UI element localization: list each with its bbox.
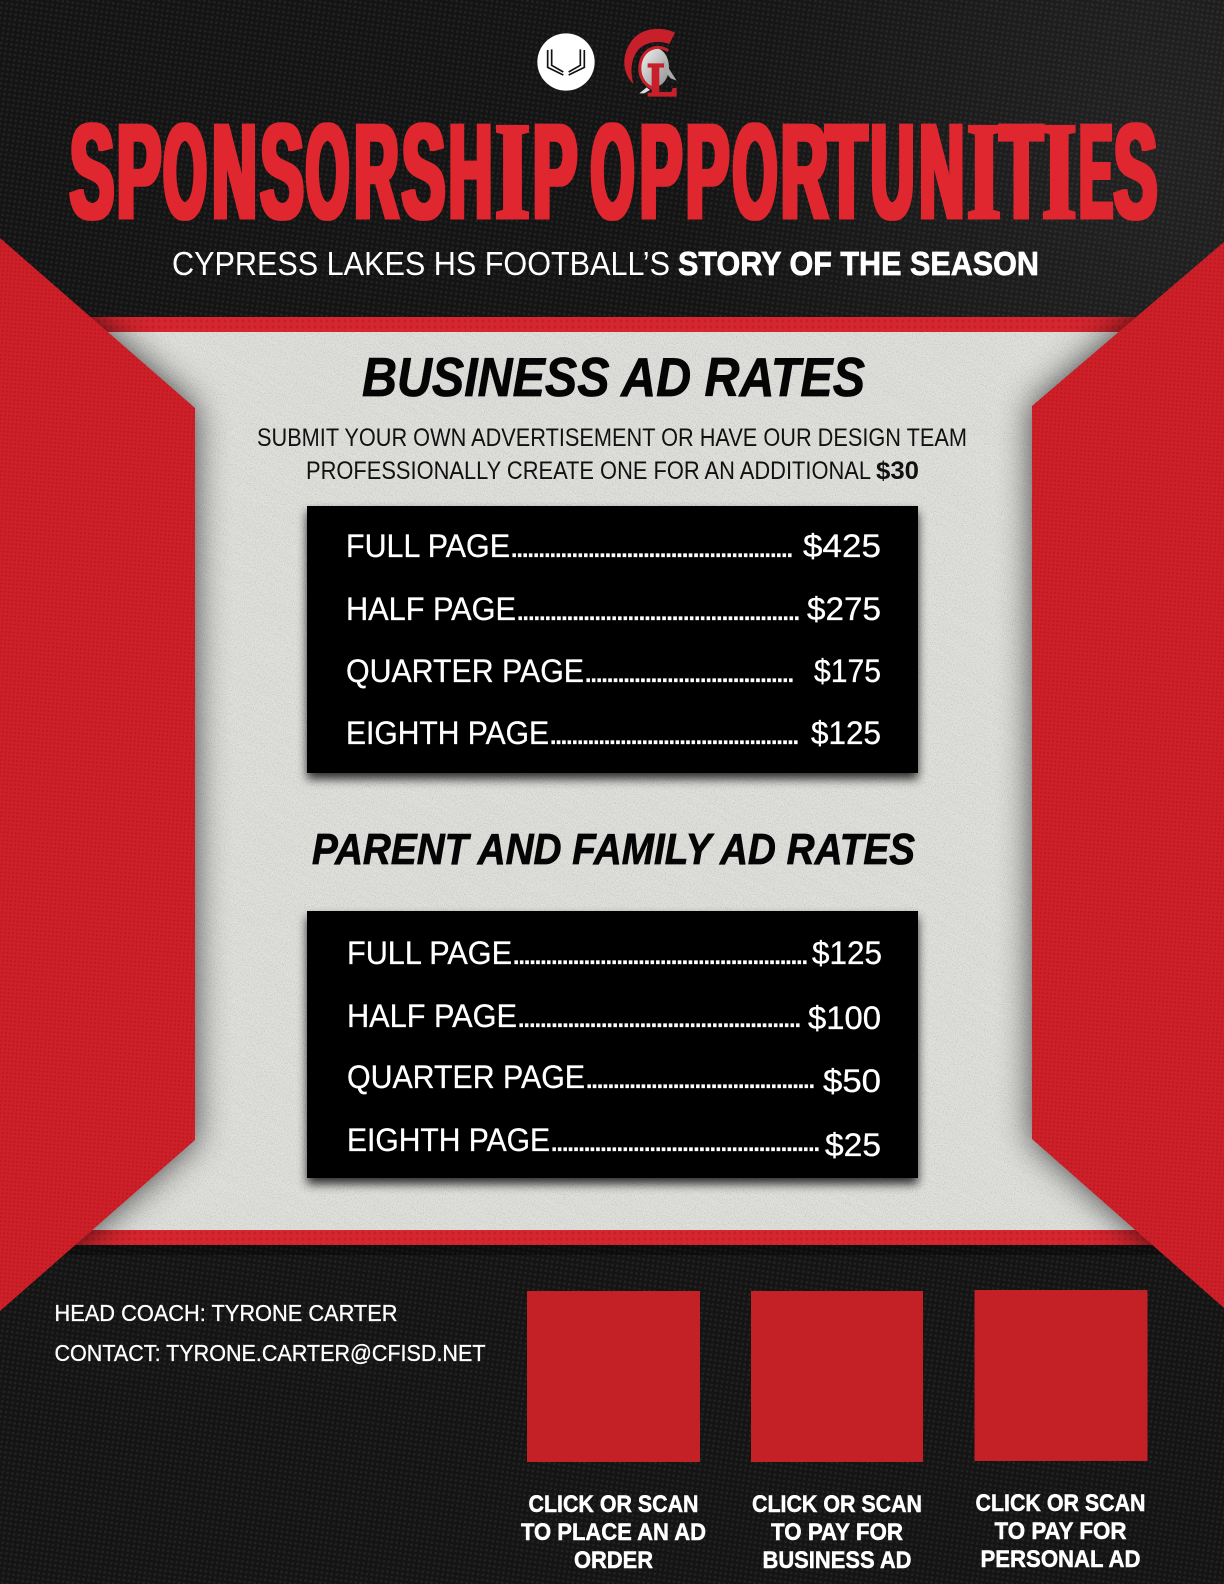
text: S (1114, 96, 1157, 247)
row: eighth page: ................................................. (551, 1130, 820, 1156)
row: half page: ................................................... (517, 599, 800, 625)
title: E (1080, 96, 1112, 247)
row: eighth page: $125 (811, 715, 881, 751)
heading: parent and family ad rates: PARENT AND FAMILY AD RATES (312, 825, 915, 874)
title: R (781, 96, 828, 247)
title (70, 94, 1157, 249)
paper and band shading cast by side panels (0, 238, 1224, 1311)
row: quarter page: ...................................... (585, 661, 794, 687)
row: eighth page (346, 715, 881, 751)
panel: business rates table (307, 506, 918, 779)
text block: design team note: PROFESSIONALLY CREATE ONE FOR AN ADDITIONAL (306, 457, 871, 485)
row: full page: $425 (803, 528, 881, 564)
row: eighth page: .............................................. (550, 723, 799, 749)
title: N (920, 96, 964, 247)
caption: pay for personal ad (976, 1490, 1146, 1573)
caption: pay for personal ad: PERSONAL AD (980, 1546, 1140, 1573)
caption: place an ad order: ORDER (574, 1547, 653, 1574)
row: eighth page (347, 1122, 881, 1163)
title: R (354, 96, 398, 247)
paper scratches (90, 332, 1140, 1230)
row: half page: ................................................... (518, 1006, 801, 1032)
row: quarter page: QUARTER PAGE (346, 653, 584, 689)
row: eighth page: $25 (825, 1127, 881, 1163)
caption: place an ad order: CLICK OR SCAN (528, 1491, 698, 1518)
text block: design team note: $30 (876, 457, 919, 485)
subtitle: STORY OF THE SEASON (678, 245, 1039, 282)
title: P (640, 96, 682, 247)
caption: pay for business ad: TO PAY FOR (771, 1519, 903, 1546)
row: full page: $125 (812, 935, 882, 971)
bottom red band (60, 1230, 1164, 1245)
row: half page (347, 998, 881, 1036)
title: I (1043, 94, 1076, 249)
caption: pay for business ad: BUSINESS AD (762, 1547, 912, 1574)
title: U (871, 96, 914, 247)
icon: spartan helmet logo (624, 29, 677, 97)
text block: coach contact: CONTACT: TYRONE.CARTER@CFISD.NET (54, 1340, 486, 1366)
paper surface (90, 332, 1140, 1230)
row: full page: FULL PAGE (346, 528, 510, 564)
row: full page: ...................................................... (513, 943, 808, 969)
row: full page (346, 528, 881, 564)
text block: coach contact: HEAD COACH: TYRONE CARTER (54, 1300, 398, 1326)
title: T (826, 96, 867, 247)
panel: left red wing (0, 238, 195, 1311)
text block: design team note (257, 424, 967, 485)
paper grain (90, 332, 1140, 1230)
subtitle (172, 245, 1039, 282)
top red band (60, 317, 1164, 332)
panel: light paper centre with red bands (60, 317, 1164, 1245)
title: P (686, 96, 729, 247)
title: I (968, 94, 1000, 249)
row: quarter page: QUARTER PAGE (347, 1059, 585, 1095)
row: eighth page: EIGHTH PAGE (347, 1122, 550, 1158)
title: P (533, 96, 577, 247)
row: quarter page (346, 653, 881, 689)
row: half page (346, 591, 881, 627)
subtitle: CYPRESS LAKES HS FOOTBALL’S (172, 245, 670, 282)
title: I (496, 94, 529, 249)
row: quarter page: $50 (823, 1063, 881, 1099)
caption: place an ad order (521, 1491, 706, 1574)
row: quarter page (347, 1059, 881, 1099)
panel: parent and family rates table (307, 911, 918, 1184)
QR placeholder: place an ad order (527, 1291, 700, 1462)
title: O (306, 96, 349, 247)
title: T (1000, 96, 1042, 247)
title: O (164, 96, 206, 247)
row: half page: $275 (807, 591, 881, 627)
text block: design team note: SUBMIT YOUR OWN ADVERTISEMENT OR HAVE OUR DESIGN TEAM (257, 424, 967, 452)
title: P (117, 96, 161, 247)
caption: place an ad order: TO PLACE AN AD (521, 1519, 706, 1546)
title: O (591, 96, 634, 247)
row: quarter page: .......................................... (586, 1067, 815, 1093)
title: S (402, 96, 445, 247)
title: O (733, 96, 777, 247)
title: N (212, 96, 256, 247)
row: half page: $100 (808, 1000, 881, 1036)
caption: pay for business ad (752, 1491, 922, 1574)
row: quarter page: $175 (814, 653, 881, 689)
shadow under the lower band (0, 1245, 1224, 1255)
caption: pay for business ad: CLICK OR SCAN (752, 1491, 922, 1518)
text block: coach contact (54, 1300, 486, 1366)
title: S (260, 96, 304, 247)
row: full page (347, 935, 882, 971)
heading: business ad rates: BUSINESS AD RATES (362, 346, 865, 408)
row: half page: HALF PAGE (347, 998, 517, 1034)
row: full page: ................................................... (511, 536, 793, 562)
caption: pay for personal ad: TO PAY FOR (994, 1518, 1126, 1545)
title: H (449, 96, 492, 247)
row: eighth page: EIGHTH PAGE (346, 715, 549, 751)
icon: book logo (537, 33, 595, 91)
QR placeholder: pay for personal ad (974, 1290, 1148, 1461)
row: half page: HALF PAGE (346, 591, 516, 627)
caption: pay for personal ad: CLICK OR SCAN (976, 1490, 1146, 1517)
panel: right red wing (1032, 242, 1224, 1308)
row: full page: FULL PAGE (347, 935, 512, 971)
title: S (70, 96, 114, 247)
QR placeholder: pay for business ad (751, 1291, 923, 1462)
